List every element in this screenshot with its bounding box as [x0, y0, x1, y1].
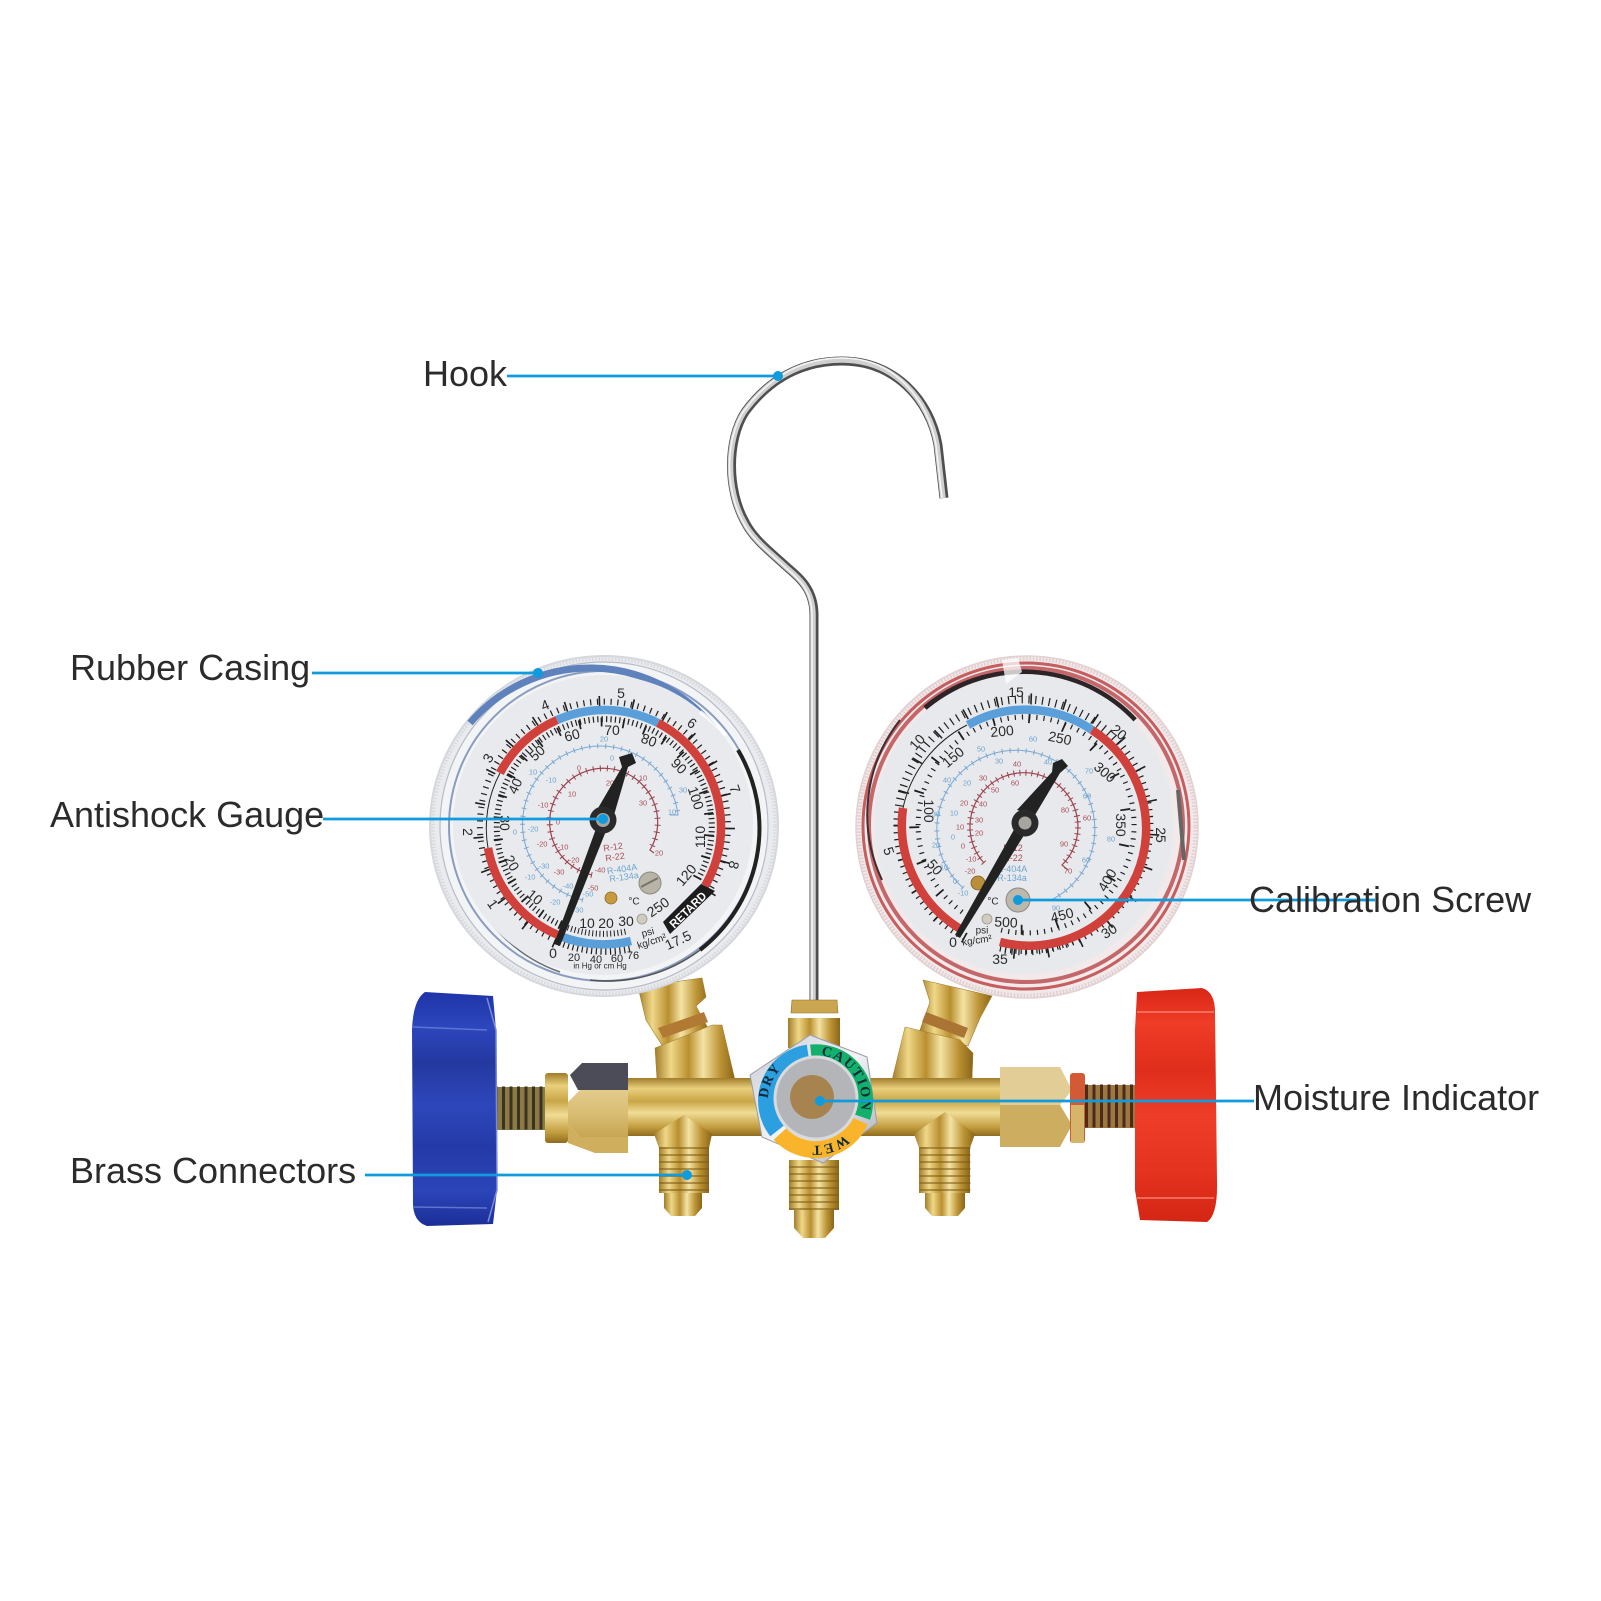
- small refrigerant numbers: -20: [550, 898, 560, 906]
- small refrigerant numbers: 20: [963, 778, 971, 788]
- small refrigerant numbers: 40: [1044, 758, 1052, 766]
- calibration screw: [639, 872, 661, 894]
- small refrigerant numbers: 40: [943, 776, 951, 784]
- small refrigerant numbers: 70: [1085, 766, 1093, 776]
- small refrigerant numbers: 10: [668, 808, 676, 816]
- brass manifold body: [412, 988, 1218, 1238]
- psi scale numbers: 100: [921, 799, 937, 823]
- small refrigerant numbers: -30: [539, 862, 549, 870]
- kg/cm2 scale numbers: 7: [726, 783, 744, 796]
- ring text: CAUTION: [822, 1047, 871, 1110]
- small refrigerant numbers: -20: [569, 856, 579, 864]
- small refrigerant numbers: 40: [1013, 760, 1021, 768]
- psi scale numbers: 250: [644, 894, 672, 920]
- psi scale numbers: 20: [568, 952, 580, 964]
- small refrigerant numbers: 0: [951, 832, 955, 842]
- small refrigerant numbers: 30: [639, 798, 647, 808]
- ring text: WET: [812, 1136, 850, 1155]
- refrigerant temperature scales: [523, 746, 678, 900]
- small refrigerant numbers: -20: [528, 824, 538, 834]
- hex housing: [750, 1035, 877, 1163]
- psi scale numbers: 200: [990, 722, 1015, 740]
- small refrigerant numbers: 10: [950, 808, 958, 818]
- ring text: DRY: [758, 1063, 779, 1098]
- RETARD label: RETARD: [667, 889, 710, 931]
- hook rod: [730, 358, 944, 1010]
- psi scale numbers: 400: [1094, 866, 1120, 894]
- small refrigerant numbers: -20: [965, 866, 975, 876]
- psi scale numbers: 150: [939, 743, 967, 771]
- outer and inner scale ticks: [897, 699, 1154, 954]
- small refrigerant numbers: 80: [1107, 834, 1115, 844]
- left hex nut: [545, 1063, 628, 1153]
- small refrigerant numbers: [513, 734, 687, 914]
- kg/cm2 scale numbers: 5: [617, 685, 625, 701]
- small refrigerant numbers: 0: [556, 818, 560, 826]
- small refrigerant numbers: 30: [932, 810, 940, 818]
- refrigerant temperature scales: [937, 750, 1095, 899]
- small refrigerant numbers: 90: [1052, 904, 1060, 912]
- small refrigerant numbers: R-404A: [606, 862, 638, 876]
- small refrigerant numbers: 20: [600, 734, 608, 744]
- psi scale numbers: 110: [692, 826, 708, 848]
- colour ring: [767, 1053, 865, 1150]
- psi scale numbers: [497, 722, 708, 970]
- brass port: [790, 1075, 834, 1119]
- kg/cm2 scale numbers: 6: [684, 714, 700, 732]
- gold pin: [605, 892, 617, 904]
- small refrigerant numbers: 20: [960, 798, 968, 808]
- kg/cm2 scale numbers: 15: [1008, 684, 1024, 700]
- psi scale numbers: psi: [976, 926, 988, 936]
- kg/cm2 scale numbers: 0: [949, 934, 957, 950]
- small refrigerant numbers: 60: [1082, 856, 1090, 864]
- small refrigerant numbers: -50: [588, 884, 598, 892]
- kg/cm2 scale numbers: 20: [1108, 721, 1130, 743]
- left threaded stem: [487, 1087, 545, 1130]
- small refrigerant numbers: 50: [977, 744, 985, 754]
- small refrigerant numbers: -10: [538, 800, 548, 810]
- psi scale numbers: 20: [598, 915, 614, 931]
- red valve knob: [1135, 988, 1217, 1222]
- kg/cm2 scale numbers: 30: [1098, 920, 1120, 942]
- psi scale numbers: 20: [501, 852, 523, 874]
- left lower port: [654, 1115, 712, 1216]
- callout: calibration screw: Calibration Screw: [1249, 879, 1532, 920]
- kg/cm2 scale numbers: 8: [725, 859, 743, 871]
- callout: brass connectors: Brass Connectors: [70, 1150, 356, 1191]
- small refrigerant numbers: 10: [940, 862, 948, 872]
- kg/cm2 scale numbers: 3: [479, 750, 497, 765]
- psi scale numbers: 350: [1113, 813, 1129, 837]
- psi scale numbers: in Hg or cm Hg: [573, 962, 627, 970]
- stamp: [982, 914, 992, 924]
- small refrigerant numbers: -30: [554, 868, 564, 876]
- psi scale numbers: 76: [627, 950, 639, 962]
- ring text: [758, 1047, 871, 1155]
- center upper collar: [788, 1000, 840, 1048]
- psi scale numbers: 500: [994, 913, 1018, 931]
- kg/cm2 scale numbers: [880, 684, 1169, 967]
- kg/cm2 scale numbers: 17.5: [662, 927, 694, 953]
- right hex nut: [1000, 1067, 1085, 1147]
- small refrigerant numbers: 10: [639, 774, 647, 782]
- psi scale numbers: [921, 722, 1129, 949]
- gold pin: [971, 876, 985, 890]
- small refrigerant numbers: 90: [1060, 840, 1068, 848]
- psi scale numbers: kg/cm²: [636, 932, 669, 952]
- kg/cm2 scale numbers: 1: [484, 896, 502, 912]
- small refrigerant numbers: R-404A: [997, 864, 1027, 874]
- small refrigerant numbers: 0: [953, 876, 957, 886]
- calibration screw: [1006, 888, 1030, 912]
- small refrigerant numbers: 80: [1061, 806, 1069, 814]
- callout: rubber casing: [70, 647, 543, 688]
- small refrigerant numbers: 60: [1029, 734, 1037, 744]
- psi scale numbers: 120: [672, 861, 700, 889]
- small refrigerant numbers: -50: [583, 890, 593, 898]
- kg/cm2 scale numbers: 5: [880, 845, 898, 857]
- psi scale numbers: 10: [524, 886, 546, 908]
- right T-junction: [892, 1027, 973, 1080]
- small refrigerant numbers: 20: [655, 848, 663, 858]
- callout: antishock gauge: [50, 794, 608, 835]
- small refrigerant numbers: -40: [563, 882, 573, 890]
- small refrigerant numbers: -10: [525, 872, 535, 882]
- psi scale numbers: °C: [628, 896, 640, 908]
- small refrigerant numbers: -30: [573, 906, 583, 914]
- psi scale numbers: 50: [924, 856, 946, 878]
- psi scale numbers: psi: [640, 926, 656, 940]
- callout: moisture indicator: [815, 1077, 1539, 1118]
- kg/cm2 scale numbers: 4: [538, 696, 552, 714]
- kg/cm2 scale numbers: 10: [906, 731, 928, 753]
- gauge bezel: blue rubber casing: [430, 656, 778, 996]
- small refrigerant numbers: -10: [958, 888, 968, 898]
- psi scale numbers: 60: [611, 953, 623, 965]
- needle: [554, 753, 636, 946]
- kg/cm2 scale numbers: 2: [460, 828, 476, 836]
- small refrigerant numbers: 0: [961, 842, 965, 850]
- small refrigerant numbers: 30: [679, 786, 687, 794]
- callout: antishock gauge: Antishock Gauge: [50, 794, 324, 835]
- small refrigerant numbers: -20: [537, 840, 547, 848]
- small refrigerant numbers: 60: [1083, 814, 1091, 822]
- small refrigerant numbers: [932, 734, 1115, 912]
- horizontal body: [628, 1078, 1000, 1136]
- small refrigerant numbers: R-134a: [609, 870, 639, 884]
- psi scale numbers: 40: [504, 775, 526, 796]
- small refrigerant numbers: 60: [1083, 792, 1091, 800]
- small refrigerant numbers: R-134a: [997, 873, 1027, 883]
- gray disc: [775, 1057, 857, 1139]
- small refrigerant numbers: 0: [577, 764, 581, 772]
- small refrigerant numbers: 10: [956, 822, 964, 832]
- psi scale numbers: 10: [579, 915, 595, 931]
- small refrigerant numbers: R-12: [1003, 843, 1023, 853]
- small refrigerant numbers: 20: [932, 840, 940, 850]
- left T-junction: [655, 1025, 735, 1080]
- stamp: [637, 914, 647, 924]
- left gauge stem: [638, 978, 710, 1050]
- psi scale numbers: 450: [1049, 904, 1076, 926]
- psi scale numbers: 50: [526, 742, 548, 764]
- small refrigerant numbers: 30: [975, 816, 983, 824]
- small refrigerant numbers: -40: [595, 866, 605, 874]
- callout: brass connectors: [70, 1150, 692, 1191]
- small refrigerant numbers: 10: [529, 768, 537, 776]
- panel: right gauge: [856, 656, 1198, 998]
- right lower port: [914, 1112, 975, 1216]
- psi scale numbers: 300: [1091, 758, 1119, 786]
- small refrigerant numbers: 70: [1064, 866, 1072, 876]
- blue valve knob: [412, 992, 497, 1226]
- small refrigerant numbers: 30: [979, 774, 987, 782]
- small refrigerant numbers: -10: [558, 842, 568, 852]
- kg/cm2 scale numbers: 35: [992, 951, 1008, 967]
- psi scale numbers: kg/cm²: [961, 933, 993, 949]
- callout: hook: [423, 353, 783, 394]
- small refrigerant numbers: 20: [606, 778, 614, 788]
- coloured pressure bands: [486, 710, 721, 944]
- small refrigerant numbers: 40: [979, 800, 987, 808]
- callout: calibration screw: [1013, 879, 1532, 920]
- center lower port: [789, 1160, 839, 1238]
- right gauge stem: [920, 980, 992, 1046]
- small refrigerant numbers: R-12: [603, 841, 623, 853]
- small refrigerant numbers: -10: [546, 776, 556, 784]
- crystal glare: [1002, 658, 1022, 684]
- kg/cm2 scale numbers: 0: [549, 945, 557, 961]
- needle: [955, 759, 1068, 938]
- psi scale numbers: 250: [1047, 728, 1073, 748]
- psi scale numbers: 100: [685, 784, 707, 812]
- moisture indicator: [750, 1034, 878, 1164]
- panel: left gauge: [430, 656, 778, 996]
- outer and inner scale ticks: [478, 701, 730, 951]
- psi scale numbers: 30: [497, 815, 513, 831]
- small refrigerant numbers: 50: [991, 786, 999, 794]
- psi scale numbers: 30: [618, 913, 634, 929]
- kg/cm2 scale numbers: 25: [1153, 827, 1169, 843]
- psi scale numbers: 80: [639, 730, 659, 750]
- small refrigerant numbers: 20: [975, 828, 983, 838]
- small refrigerant numbers: R-22: [605, 851, 625, 863]
- callout: hook: Hook: [423, 353, 508, 394]
- right threaded stem: [1085, 1085, 1138, 1128]
- psi scale numbers: 70: [604, 722, 620, 738]
- kg/cm2 scale numbers: [460, 685, 744, 961]
- coloured pressure bands: [902, 710, 1146, 946]
- psi scale numbers: 60: [562, 725, 582, 745]
- psi scale numbers: °C: [987, 896, 999, 908]
- callout: moisture indicator: Moisture Indicator: [1253, 1077, 1539, 1118]
- psi scale numbers: 90: [668, 755, 690, 777]
- psi scale numbers: 40: [590, 954, 602, 966]
- small refrigerant numbers: -10: [966, 854, 976, 864]
- small refrigerant numbers: 30: [995, 756, 1003, 766]
- crystal reflection: [700, 712, 726, 735]
- gauge bezel: red rubber casing: [856, 656, 1198, 998]
- small refrigerant numbers: 10: [568, 790, 576, 798]
- callout: rubber casing: Rubber Casing: [70, 647, 310, 688]
- small refrigerant numbers: 0: [610, 754, 614, 762]
- small refrigerant numbers: 0: [513, 828, 517, 836]
- small refrigerant numbers: R-22: [1003, 853, 1023, 863]
- small refrigerant numbers: 60: [1011, 778, 1019, 788]
